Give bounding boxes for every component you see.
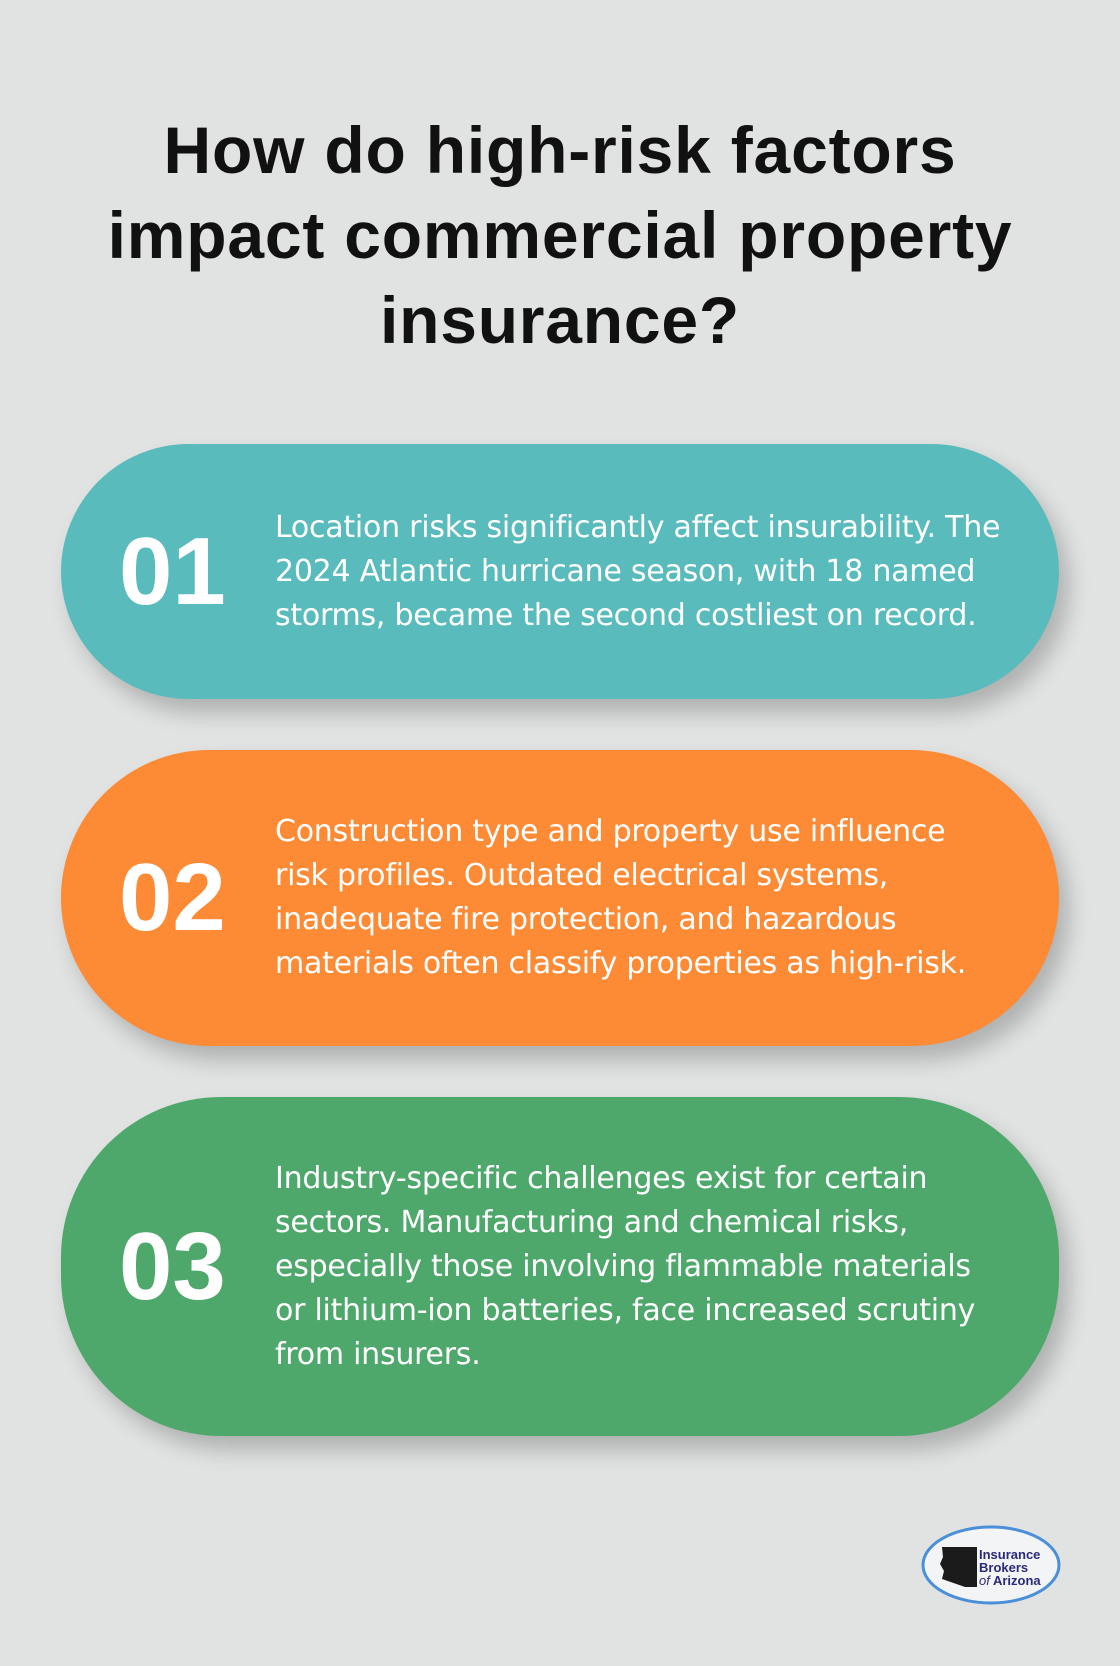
- text 01: Location risks significantly affect insurability. The: [275, 510, 1000, 545]
- text 02: Construction type and property use influence: [275, 814, 945, 849]
- card 01: [61, 444, 1059, 699]
- number 01: 01: [119, 518, 226, 625]
- title: impact commercial property: [108, 198, 1012, 272]
- text 02: materials often classify properties as high-risk.: [275, 946, 966, 981]
- text 03: [275, 1161, 975, 1372]
- text 02: risk profiles. Outdated electrical systems,: [275, 858, 888, 893]
- text 02: inadequate fire protection, and hazardous: [275, 902, 896, 937]
- text 01: storms, became the second costliest on record.: [275, 598, 976, 633]
- text 02: [275, 814, 966, 981]
- logo: [922, 1526, 1060, 1604]
- number 03: 03: [119, 1213, 226, 1320]
- card 03: [61, 1097, 1059, 1436]
- title: [108, 113, 1012, 357]
- card 02: [61, 750, 1059, 1046]
- text 01: 2024 Atlantic hurricane season, with 18 named: [275, 554, 975, 589]
- text 03: sectors. Manufacturing and chemical risks,: [275, 1205, 908, 1240]
- text 01: [275, 510, 1000, 633]
- logo: Insurance: [979, 1547, 1040, 1562]
- text 03: or lithium-ion batteries, face increased scrutiny: [275, 1293, 975, 1328]
- logo: Brokers: [979, 1560, 1028, 1575]
- title: How do high-risk factors: [164, 113, 956, 187]
- logo: of Arizona: [979, 1573, 1041, 1588]
- title: insurance?: [380, 283, 740, 357]
- text 03: especially those involving flammable materials: [275, 1249, 971, 1284]
- number 02: 02: [119, 844, 226, 951]
- text 03: Industry-specific challenges exist for certain: [275, 1161, 927, 1196]
- text 03: from insurers.: [275, 1337, 480, 1372]
